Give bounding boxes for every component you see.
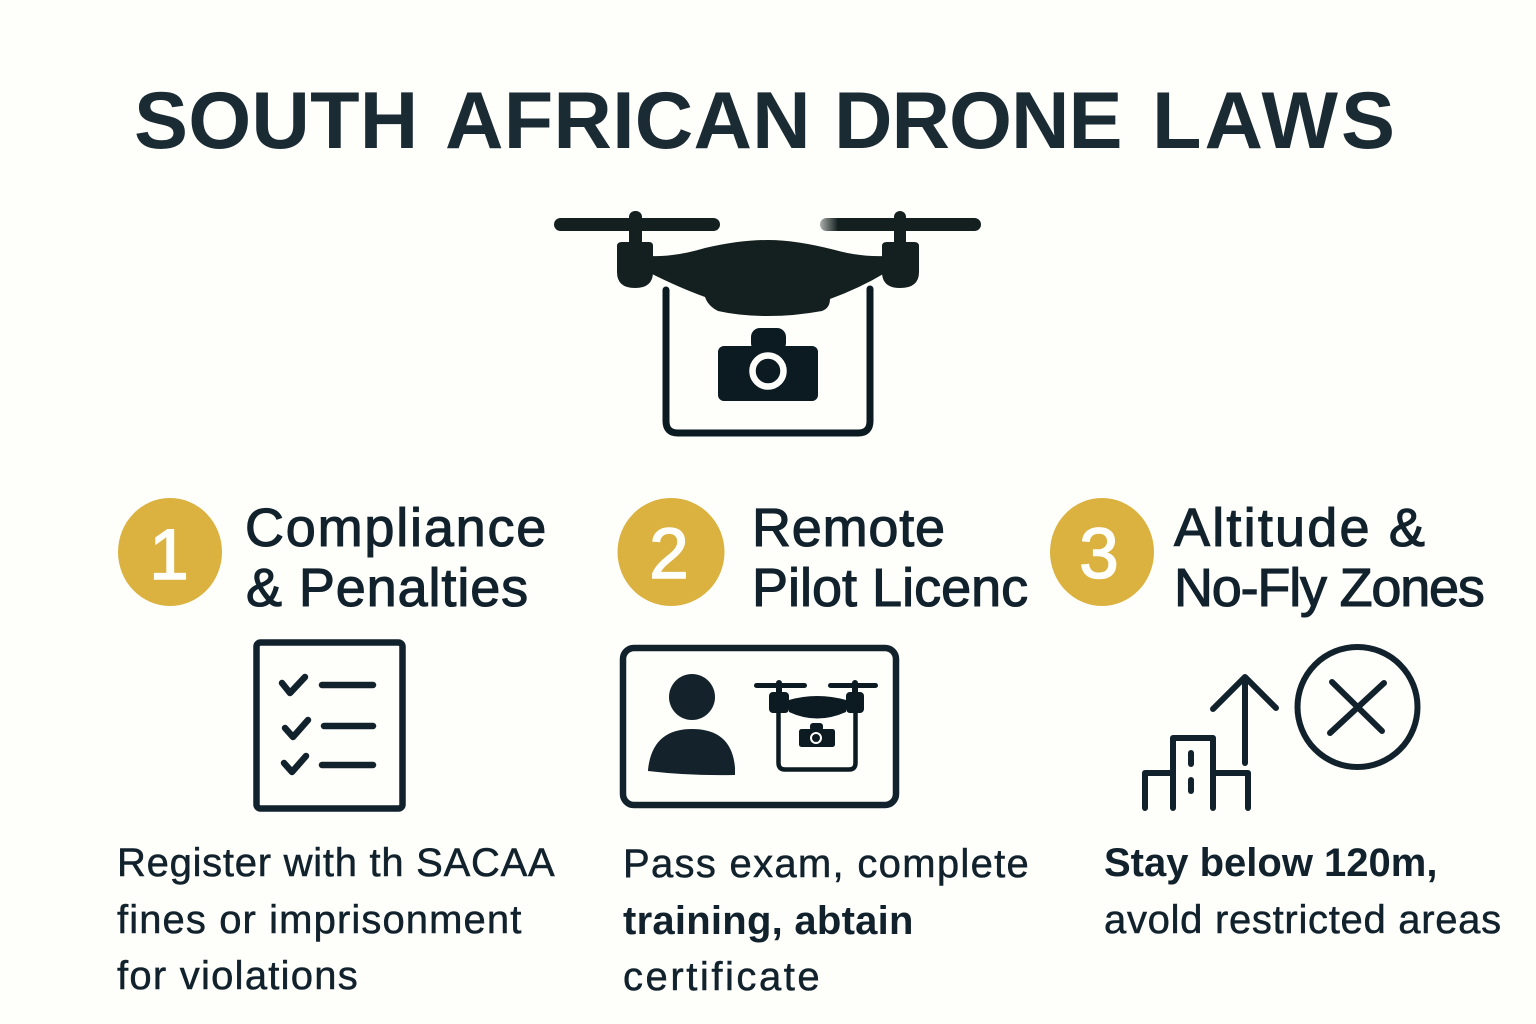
title: LAWS (1152, 76, 1398, 166)
title: AFRICAN (445, 76, 811, 166)
title: SOUTH (134, 76, 418, 166)
text: altitude description (1104, 841, 1502, 942)
icon: pilot licence card (623, 648, 896, 805)
heading: altitude and no-fly zones (1173, 498, 1484, 618)
icon: checklist (256, 642, 402, 808)
text: compliance description (117, 841, 555, 998)
number badge 3: 3 (1079, 515, 1119, 594)
heading: compliance and penalties: & Penalties (246, 558, 529, 618)
icon: altitude limit and no-fly (1145, 647, 1418, 808)
number badge 2: 2 (649, 515, 689, 594)
number badge 2 (618, 498, 724, 606)
number badge 3 (1050, 498, 1154, 606)
heading: remote pilot licence (752, 498, 1028, 618)
text: compliance description: for violations (117, 954, 359, 998)
title (134, 76, 1398, 166)
text: altitude description: Stay below 120m, (1104, 841, 1437, 885)
text: compliance description: fines or imprisonment (117, 898, 522, 942)
number badge 1: 1 (149, 516, 189, 595)
number badge 1 (118, 498, 222, 606)
icon: drone with camera (554, 211, 981, 433)
text: licence description (623, 842, 1030, 999)
heading: altitude and no-fly zones: Altitude & (1174, 498, 1427, 558)
title: DRONE (834, 76, 1122, 166)
heading: altitude and no-fly zones: No-Fly Zones (1174, 558, 1484, 618)
text: licence description: Pass exam, complete (623, 842, 1030, 886)
heading: compliance and penalties: Compliance (245, 498, 548, 558)
text: compliance description: Register with th SACAA (117, 841, 555, 885)
text: altitude description: avold restricted areas (1104, 898, 1502, 942)
heading: remote pilot licence: Pilot Licenc (752, 558, 1028, 618)
heading: compliance and penalties (245, 498, 548, 618)
text: licence description: training, abtain (623, 898, 914, 942)
text: licence description: certificate (623, 955, 822, 999)
heading: remote pilot licence: Remote (752, 498, 946, 558)
